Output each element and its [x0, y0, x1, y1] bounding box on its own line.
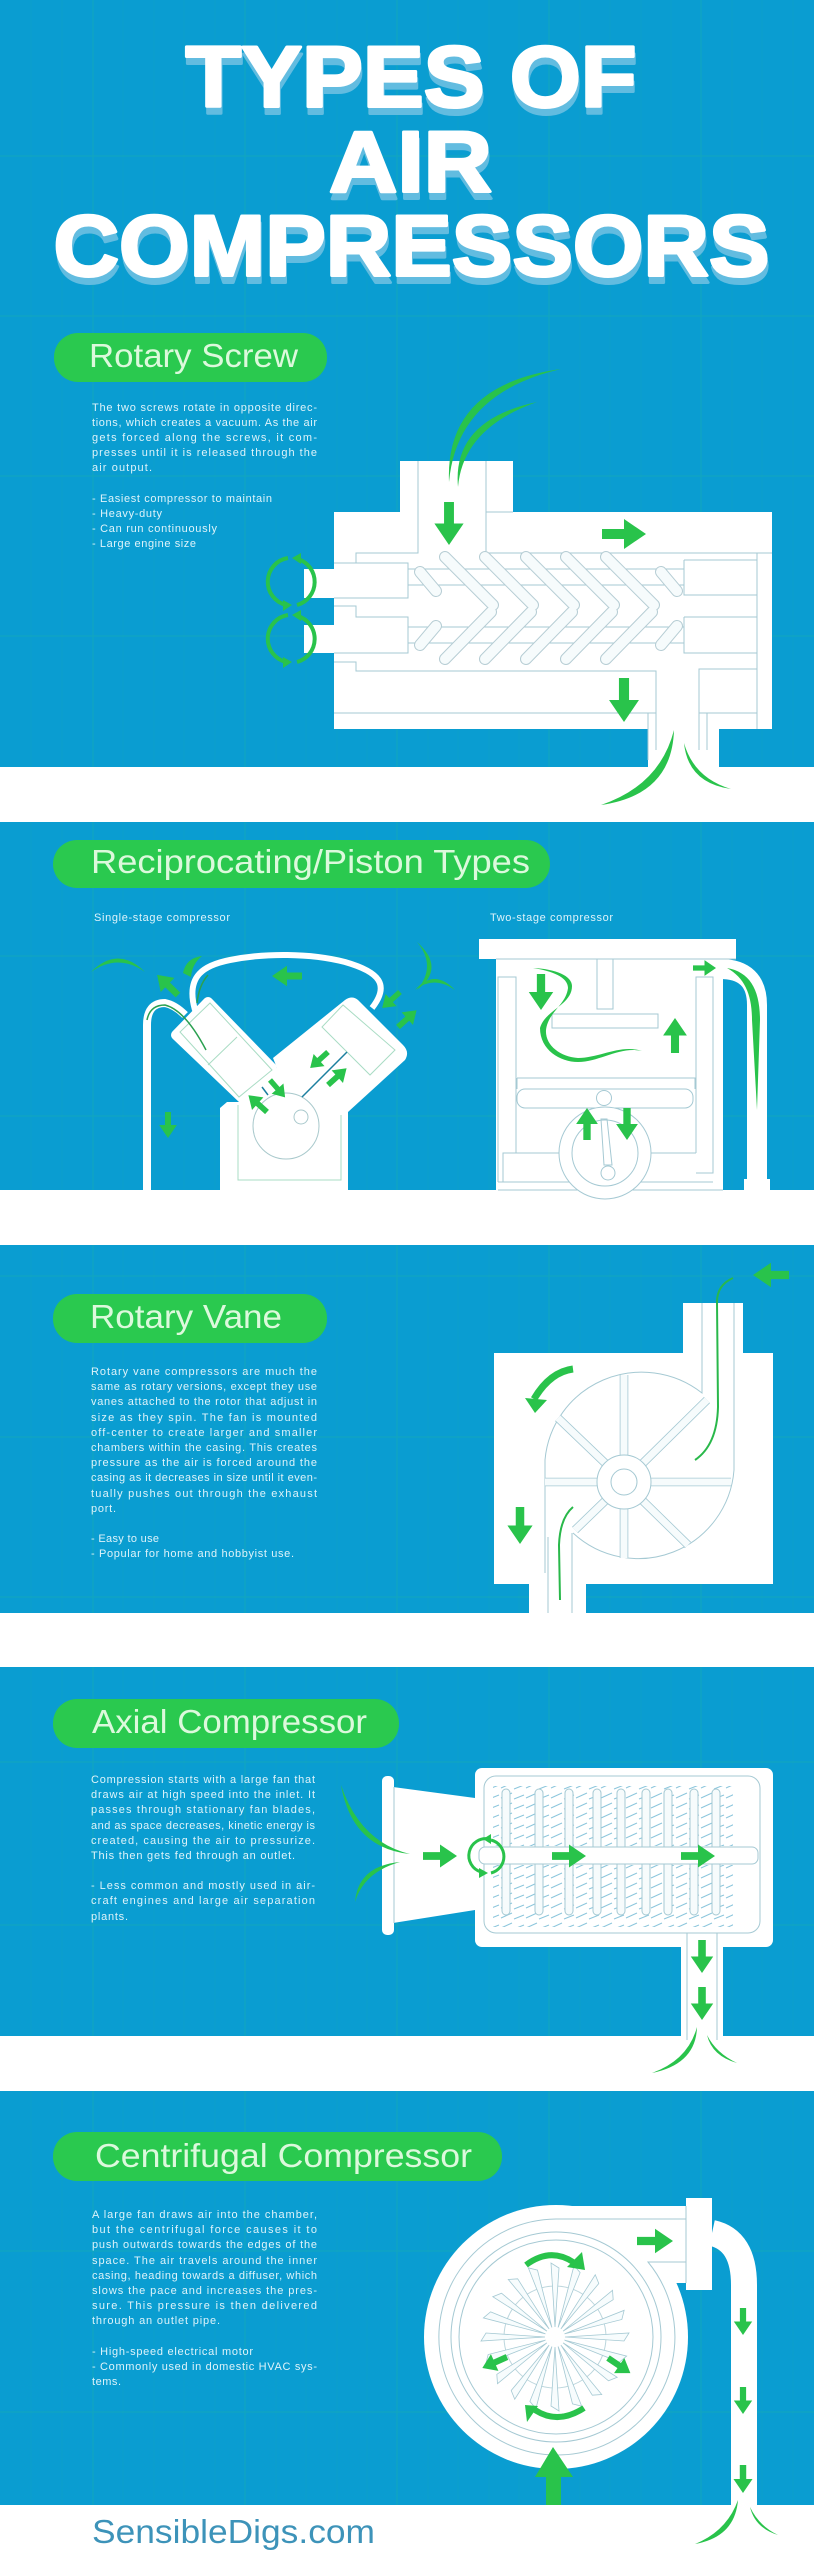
text block: centrifugal description: - Commonly used in domestic HVAC sys- [92, 2361, 317, 2373]
text block: centrifugal description: slows the pace and increases the pres- [92, 2285, 317, 2297]
label: single stage: Single-stage compressor [94, 912, 230, 924]
text block: rotary vane description: off-center to create larger and smaller [91, 1427, 317, 1439]
text block: centrifugal description: push outwards towards the edges of the [92, 2239, 317, 2251]
diagram: single stage compressor [91, 942, 455, 1190]
text block: rotary vane description: casing as it decreases in size until it even- [91, 1472, 317, 1484]
text block: rotary vane description: tually pushes out through the exhaust [91, 1488, 317, 1500]
text block: centrifugal description: A large fan draws air into the chamber, [92, 2209, 317, 2221]
text block: rotary screw description: gets forced along the screws, it com- [92, 432, 317, 444]
text block: rotary screw description: - Easiest compressor to maintain [92, 493, 272, 505]
arrows: axial flow [423, 1844, 715, 2020]
icon: rotation arrows [268, 553, 315, 668]
arrow: inlet left [753, 1263, 789, 1287]
title: COMPRESSORS [54, 198, 769, 294]
title [54, 30, 769, 294]
text block: axial description [91, 1774, 316, 1923]
text block: rotary screw description: air output. [92, 462, 152, 474]
arrows: single stage flow [150, 966, 422, 1138]
air line: inlet [695, 1278, 733, 1460]
text block: centrifugal description: casing, heading towards a diffuser, which [92, 2270, 317, 2282]
text block: axial description: plants. [91, 1911, 128, 1923]
text block: centrifugal description: but the centrifugal force causes it to [92, 2224, 317, 2236]
text block: rotary screw description [92, 402, 317, 550]
diagram: centrifugal compressor [424, 2198, 778, 2544]
label: two stage: Two-stage compressor [490, 912, 613, 924]
air swooshes: centrifugal [695, 2500, 778, 2544]
arrow: right [602, 519, 646, 549]
text block: rotary vane description: pressure as the air is forced around the [91, 1457, 317, 1469]
text block: axial description: craft engines and large air separation [91, 1895, 315, 1907]
text block: axial description: draws air at high speed into the inlet. It [91, 1789, 315, 1801]
panel: centrifugal compressor [53, 2132, 778, 2544]
text block: rotary screw description: tions, which creates a vacuum. As the air [92, 417, 317, 429]
text block: axial description: Compression starts with a large fan that [91, 1774, 315, 1786]
text block: rotary vane description: size as they spin. The fan is mounted [91, 1412, 317, 1424]
text block: rotary vane description: port. [91, 1503, 116, 1515]
text block: axial description: created, causing the air to pressurize. [91, 1835, 315, 1847]
text block: centrifugal description: - High-speed electrical motor [92, 2346, 253, 2358]
heading pill: rotary vane: Rotary Vane [90, 1298, 282, 1335]
icon: rotation ring [469, 1834, 504, 1878]
text block: rotary screw description: The two screws rotate in opposite direc- [92, 402, 317, 414]
heading pill: axial [53, 1699, 399, 1748]
title: AIR [329, 114, 492, 210]
text block: rotary vane description: - Easy to use [91, 1533, 159, 1545]
heading pill: reciprocating: Reciprocating/Piston Types [91, 843, 530, 880]
text block: rotary vane description: Rotary vane compressors are much the [91, 1366, 317, 1378]
heading pill: rotary vane [53, 1294, 327, 1343]
text block: rotary vane description: vanes attached to the rotor that adjust in [91, 1396, 317, 1408]
air swooshes: inlet [449, 369, 561, 487]
air lines [147, 975, 208, 1050]
text block: centrifugal description [92, 2209, 317, 2388]
text block: centrifugal description: tems. [92, 2376, 121, 2388]
panel: rotary screw [54, 333, 772, 805]
text block: rotary screw description: - Heavy-duty [92, 508, 162, 520]
arrow: inlet down [434, 502, 464, 545]
arrow: outlet down [609, 678, 639, 722]
footer: website: SensibleDigs.com [92, 2513, 375, 2550]
diagram: two stage compressor [479, 939, 770, 1199]
air line: outlet [559, 1507, 573, 1600]
heading pill: reciprocating [53, 840, 550, 888]
panel: reciprocating piston [53, 840, 770, 1199]
panel: axial compressor [53, 1699, 773, 2073]
arrow: big inlet up [535, 2447, 573, 2505]
text block: axial description: passes through stationary fan blades, [91, 1804, 315, 1816]
text block: centrifugal description: through an outlet pipe. [92, 2315, 220, 2327]
heading pill: rotary screw [54, 333, 327, 382]
air swooshes: single stage [91, 942, 455, 990]
air swooshes: two stage [533, 968, 760, 1110]
text block: rotary screw description: - Large engine size [92, 538, 196, 550]
heading pill: centrifugal: Centrifugal Compressor [95, 2137, 472, 2174]
diagram: rotary vane compressor [494, 1263, 789, 1613]
text block: rotary screw description: - Can run continuously [92, 523, 218, 535]
panel: rotary vane [53, 1263, 789, 1613]
diagram: rotary screw compressor [268, 369, 772, 805]
text block: centrifugal description: sure. This pressure is then delivered [92, 2300, 317, 2312]
text block: axial description: and as space decreases, kinetic energy is [91, 1820, 316, 1832]
heading pill: rotary screw: Rotary Screw [89, 337, 298, 374]
air swooshes: outlet [601, 730, 731, 805]
air swooshes: axial [341, 1785, 737, 2073]
arrows: two stage flow [529, 960, 716, 1140]
text block: axial description: - Less common and mostly used in air- [91, 1880, 315, 1892]
heading pill: axial: Axial Compressor [92, 1703, 367, 1740]
arrow: outlet down [507, 1507, 533, 1544]
text block: rotary screw description: presses until it is released through the [92, 447, 317, 459]
text block: centrifugal description: space. The air travels around the inner [92, 2255, 317, 2267]
arrow: curved [534, 1369, 573, 1399]
heading pill: centrifugal [53, 2132, 502, 2181]
text block: rotary vane description: same as rotary versions, except they use [91, 1381, 317, 1393]
diagram: axial compressor [341, 1768, 773, 2073]
text block: rotary vane description [91, 1366, 318, 1560]
title: TYPES OF [186, 30, 636, 126]
text block: rotary vane description: chambers within the casing. This creates [91, 1442, 318, 1454]
text block: rotary vane description: - Popular for home and hobbyist use. [91, 1548, 294, 1560]
impeller blades [481, 2263, 629, 2411]
arrows: curved rotation [525, 2252, 585, 2422]
text block: axial description: This then gets fed through an outlet. [91, 1850, 295, 1862]
arrows: centrifugal flow [479, 2229, 753, 2493]
